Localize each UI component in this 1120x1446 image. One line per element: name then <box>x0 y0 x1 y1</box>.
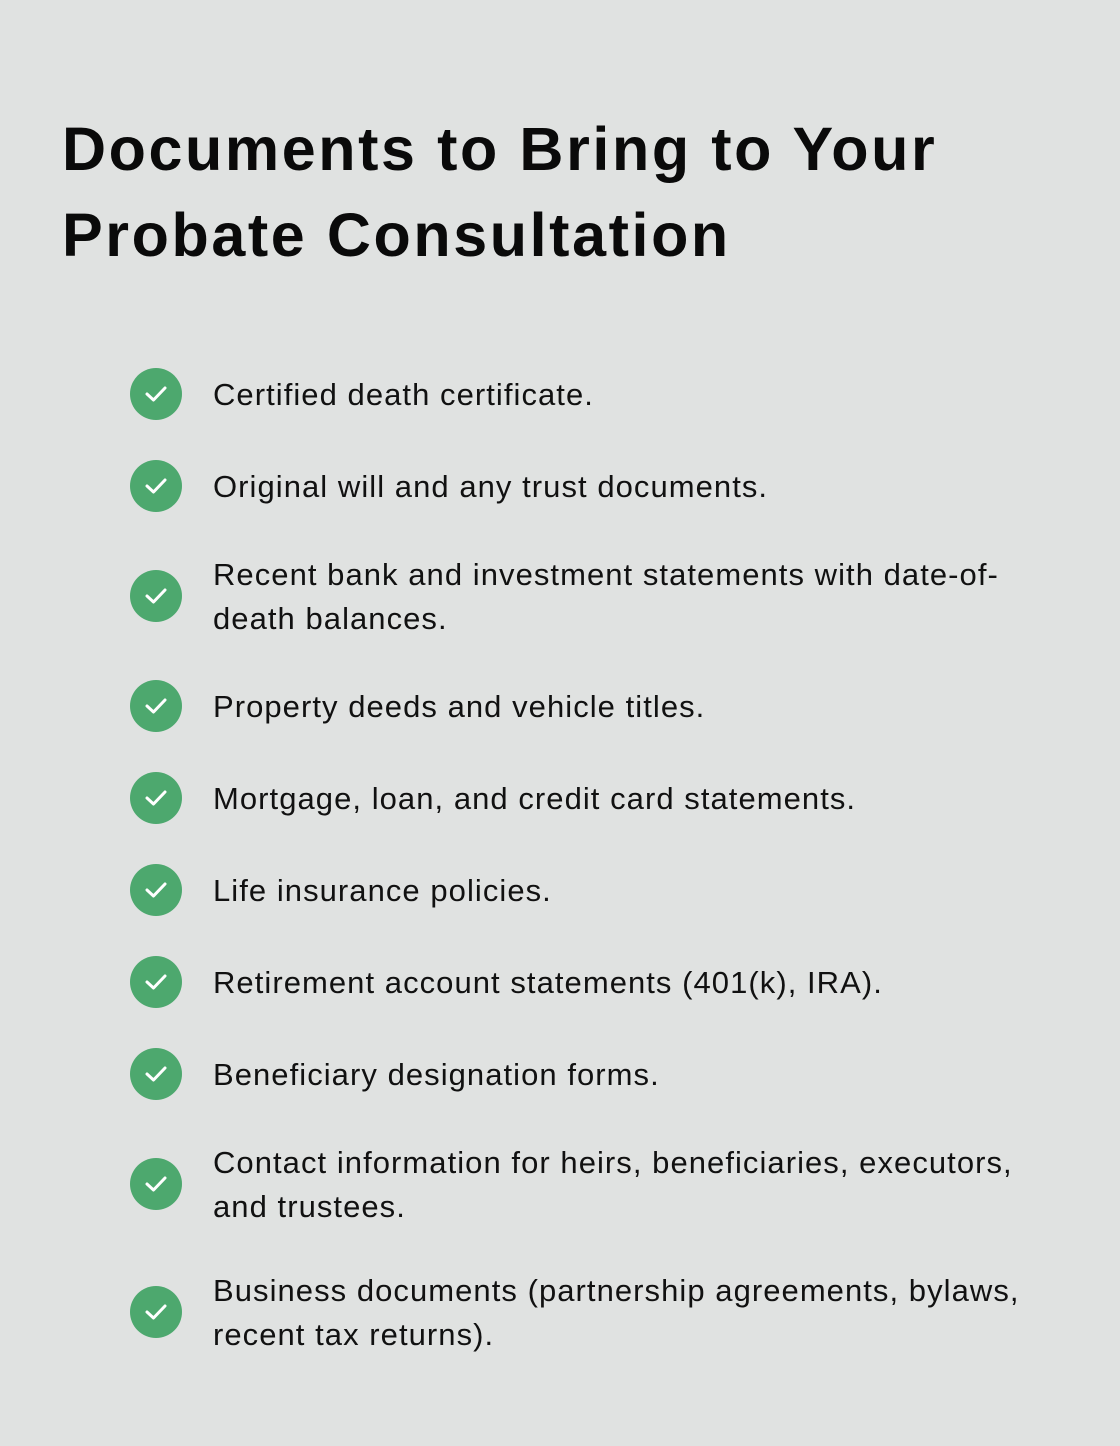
item 8 <box>130 1048 660 1100</box>
title <box>62 115 937 269</box>
item 2 <box>130 460 768 512</box>
item 6 <box>130 864 552 916</box>
title: Probate Consultation <box>62 201 731 269</box>
title: Documents to Bring to Your <box>62 115 937 183</box>
item 5 <box>130 772 856 824</box>
item 8: Beneficiary designation forms. <box>213 1057 660 1092</box>
item 10: Business documents (partnership agreements, bylaws, <box>213 1273 1020 1308</box>
item 9: and trustees. <box>213 1189 406 1224</box>
item 5: Mortgage, loan, and credit card statements. <box>213 781 856 816</box>
item 6: Life insurance policies. <box>213 873 552 908</box>
item 7 <box>130 956 883 1008</box>
item 4: Property deeds and vehicle titles. <box>213 689 705 724</box>
item 9 <box>130 1145 1013 1224</box>
item 9: Contact information for heirs, beneficiaries, executors, <box>213 1145 1013 1180</box>
item 10 <box>130 1273 1020 1352</box>
item 10: recent tax returns). <box>213 1317 494 1352</box>
item 1: Certified death certificate. <box>213 377 594 412</box>
item 2: Original will and any trust documents. <box>213 469 768 504</box>
item 3: death balances. <box>213 601 448 636</box>
item 4 <box>130 680 705 732</box>
item 3: Recent bank and investment statements with date-of- <box>213 557 999 592</box>
item 1 <box>130 368 594 420</box>
item 7: Retirement account statements (401(k), IRA). <box>213 965 883 1000</box>
item 3 <box>130 557 999 636</box>
